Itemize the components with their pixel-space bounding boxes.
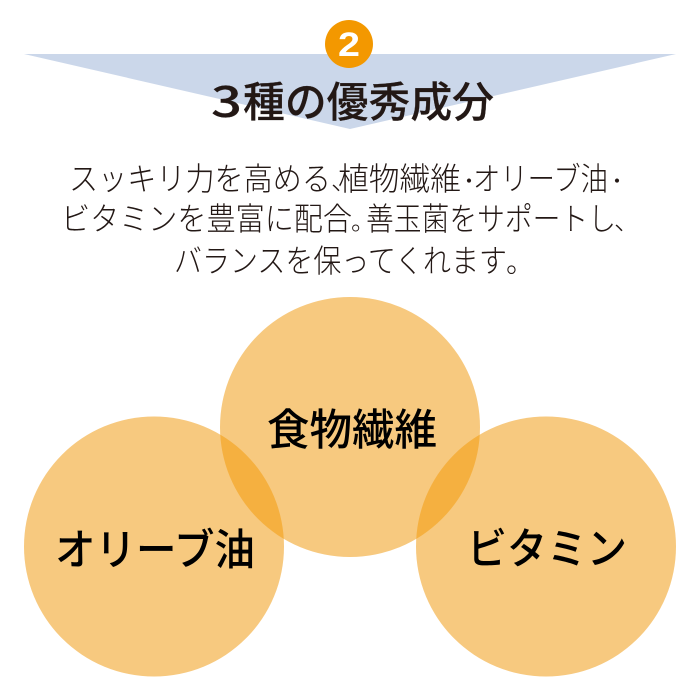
- description text: バランスを保ってくれます: [174, 243, 507, 279]
- description text: [61, 161, 640, 279]
- description text: 植物繊維: [338, 161, 461, 197]
- description text: 善玉菌をサポートし: [366, 201, 616, 237]
- circle: dietary fiber: [220, 297, 480, 557]
- description text: ・: [606, 169, 628, 194]
- description text: 、: [331, 166, 357, 196]
- description text: 、: [614, 206, 640, 236]
- description text: 。: [351, 209, 375, 236]
- step number badge: [325, 20, 373, 68]
- title: 種の優秀成分: [243, 69, 494, 130]
- venn diagram: [24, 297, 676, 676]
- banner triangle: [24, 54, 676, 129]
- overlap: fiber and vitamins: [416, 434, 480, 539]
- circle: vitamins: [416, 416, 676, 676]
- overlap: fiber and olive oil: [220, 434, 284, 539]
- description text: ビタミンを豊富に配合: [61, 201, 352, 237]
- description text: スッキリ力を高める: [69, 161, 331, 197]
- description text: オリーブ油: [473, 161, 608, 197]
- label: dietary fiber: 食物繊維: [267, 407, 437, 455]
- circle: olive oil: [24, 416, 284, 676]
- title: 3: [211, 69, 242, 130]
- description text: 。: [506, 247, 534, 278]
- step number badge: 2: [338, 26, 360, 64]
- description text: ・: [458, 169, 480, 194]
- label: olive oil: オリーブ油: [55, 527, 255, 575]
- label: vitamins: ビタミン: [467, 526, 627, 574]
